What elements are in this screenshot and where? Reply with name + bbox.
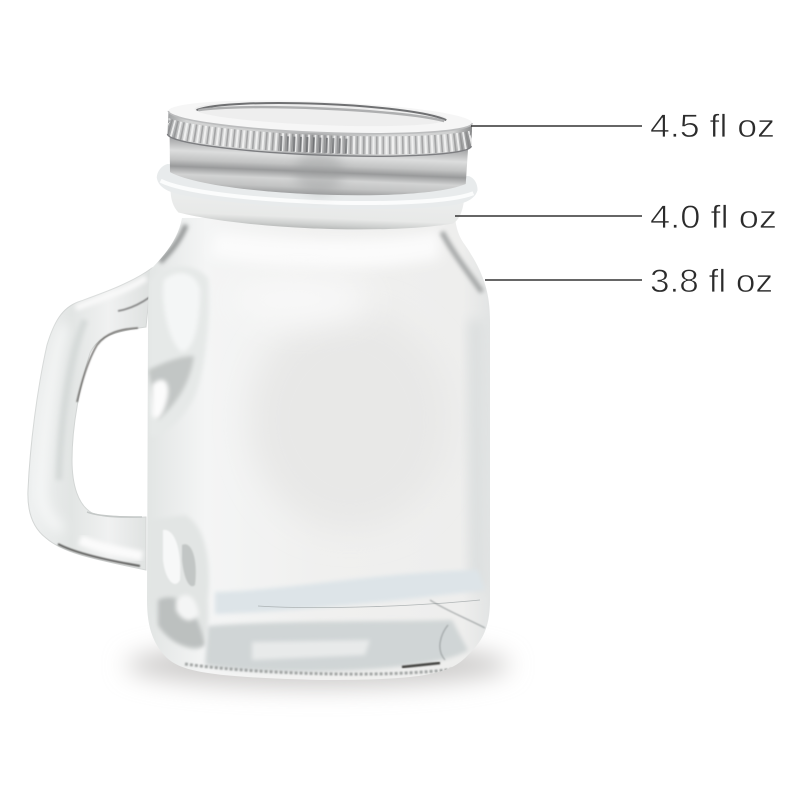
glass reflections: [160, 225, 486, 590]
callout: 3.8 fl oz: 3.8 fl oz: [650, 263, 773, 299]
ground shadow: [126, 642, 510, 688]
upper handle attachment: [148, 270, 208, 418]
jar body: [147, 216, 490, 680]
infographic: jar with capacity labels: [27, 100, 775, 700]
knurled band: [166, 112, 472, 157]
metal skirt: [167, 132, 468, 200]
handle dark edges: [77, 328, 138, 402]
lid, ring and neck, tilted with the jar's perspective: [155, 95, 481, 235]
callout: 4.5 fl oz: 4.5 fl oz: [650, 108, 775, 144]
icon: glass handle: [28, 268, 152, 570]
glass base: [205, 620, 468, 672]
glass neck: [169, 184, 464, 234]
callout: 4.0 fl oz: 4.0 fl oz: [650, 199, 777, 235]
white ring: [156, 164, 478, 214]
lid top: [168, 95, 473, 139]
blue-tinted band: [215, 570, 485, 614]
lower handle attachment: [156, 516, 209, 651]
